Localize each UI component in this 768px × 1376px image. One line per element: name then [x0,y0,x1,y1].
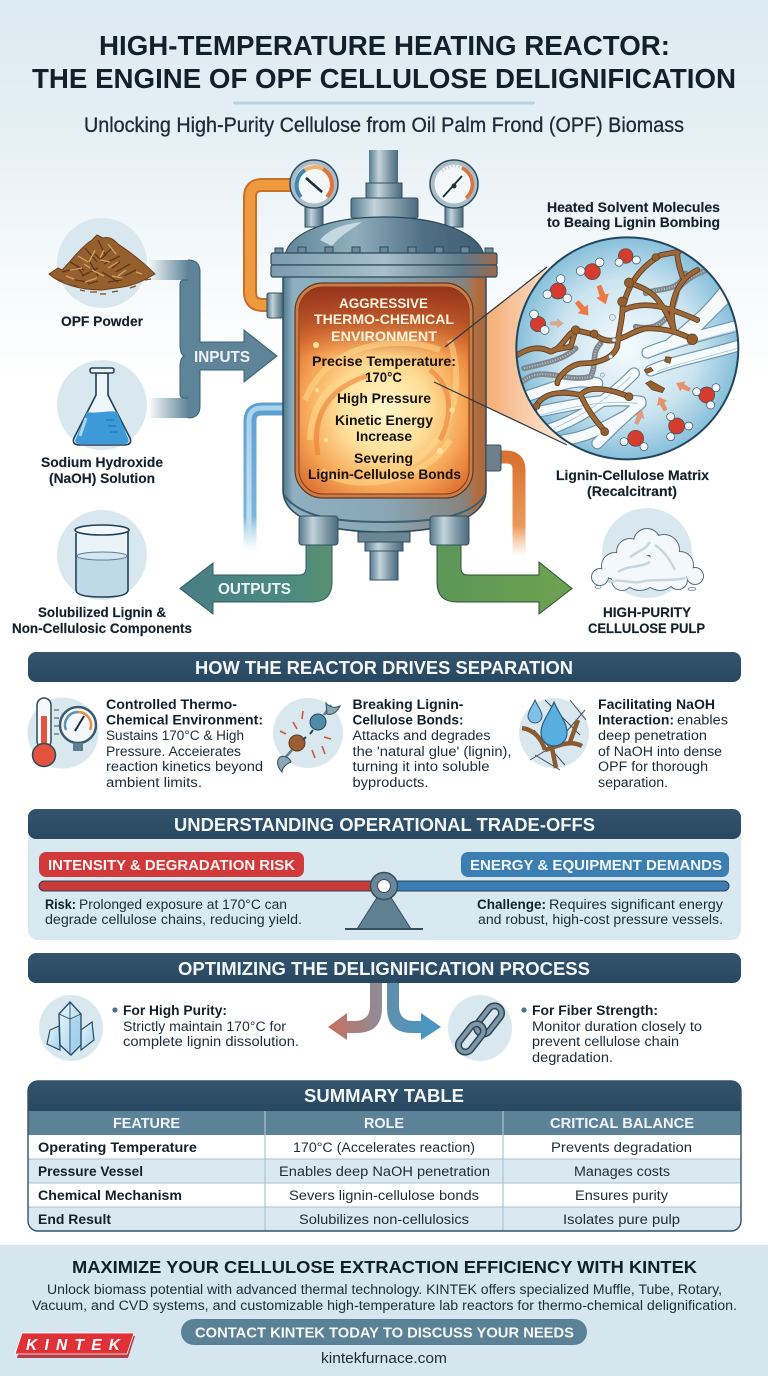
table columns header: FEATURE [113,1115,180,1132]
item: high purity: Strictly maintain 170°C for [123,1019,287,1034]
text: risk [45,897,302,927]
arrow: inputs: INPUTS [194,349,250,366]
item: fiber strength: Monitor duration closely to [532,1019,702,1034]
item: high purity: For High Purity: [123,1003,227,1018]
window text: Severing [354,450,413,466]
pill: intensity and degradation risk: INTENSITY & DEGRADATION RISK [48,857,295,874]
pipe: top left orange [250,185,310,305]
website: kintekfurnace.com [321,1350,447,1367]
footer panel [0,1245,768,1376]
item: controlled environment: Sustains 170°C & High [106,728,244,743]
input item: NaOH flask [57,360,147,450]
item: controlled environment [28,697,263,790]
item: facilitating NaOH interaction: separation. [598,775,668,790]
title: HIGH-TEMPERATURE HEATING REACTOR: [99,30,670,61]
table rows [38,1140,692,1227]
contact button: CONTACT KINTEK TODAY TO DISCUSS YOUR NEEDS [195,1324,574,1342]
table rows: Isolates pure pulp [563,1212,680,1227]
window text: Precise Temperature: [312,353,456,369]
footer heading: MAXIMIZE YOUR CELLULOSE EXTRACTION EFFICIENCY WITH KINTEK [72,1257,697,1277]
summary table [28,1081,741,1231]
side couplings [267,293,283,318]
label: high-purity cellulose pulp: CELLULOSE PULP [588,621,705,636]
gauge: left [290,160,338,208]
table rows: Severs lignin-cellulose bonds [289,1188,479,1203]
icon: chain link [448,995,512,1061]
bottom feet [299,516,338,545]
arrow: cellulose output [437,545,572,614]
label: sodium hydroxide: Sodium Hydroxide [41,455,164,470]
window text: High Pressure [337,390,431,406]
output item: beaker [57,510,147,600]
label: solubilized lignin: Solubilized Lignin & [38,605,166,620]
label: heated solvent molecules: to Beaing Lignin Bombing [547,215,720,230]
fragment sparkles [600,314,616,377]
icon: crystal [39,995,103,1061]
text: risk: degrade cellulose chains, reducing yield. [45,912,302,927]
table rows: End Result [38,1212,112,1227]
table rows: Ensures purity [575,1188,668,1203]
pill: energy and equipment demands [461,852,729,877]
item: breaking bonds: byproducts. [352,775,428,790]
KINTEK logo [15,1333,135,1358]
item: controlled environment: Pressure. Acceierates [106,744,241,759]
pipe: right orange [496,457,519,556]
zoom cone [434,267,567,445]
table rows: 170°C (Accelerates reaction) [293,1140,475,1155]
vessel flange [271,253,497,265]
label: heated solvent molecules [547,200,720,230]
table rows: Solubilizes non-cellulosics [299,1212,469,1227]
label: solubilized lignin [12,605,192,636]
section header: optimizing: OPTIMIZING THE DELIGNIFICATION PROCESS [178,959,590,979]
pipe: left blue [249,408,285,552]
section header: optimizing [28,953,741,983]
section header: trade-offs [28,809,741,839]
item: breaking bonds: Cellulose Bonds: [352,712,464,728]
table rows: Prevents degradation [551,1140,692,1155]
balance scale [39,872,729,930]
item: fiber strength: prevent cellulose chain [532,1034,679,1049]
label: lignin-cellulose matrix: (Recalcitrant) [587,484,677,499]
text: risk: Prolonged exposure at 170°C can [79,897,287,912]
footer text: Unlock biomass potential with advanced thermal technology. KINTEK offers specialized Muffle, Tube, Rotary, [47,1282,722,1297]
item: facilitating NaOH interaction [519,697,728,790]
vessel top pipe [369,150,398,185]
reactor vessel [267,150,501,580]
item: controlled environment: Controlled Thermo- [106,697,237,712]
footer text: Vacuum, and CVD systems, and customizable high-temperature lab reactors for thermo-chemical delignification. [32,1298,737,1313]
section header: trade-offs: UNDERSTANDING OPERATIONAL TRADE-OFFS [174,815,595,835]
table columns header [113,1115,694,1132]
label: OPF powder: OPF Powder [61,314,144,329]
item: facilitating NaOH interaction: deep penetration [598,728,707,743]
window text: AGGRESSIVE [339,295,428,311]
item: facilitating NaOH interaction: Interaction: [598,712,674,728]
table rows: Enables deep NaOH penetration [279,1164,490,1179]
grey lignin strands [521,270,707,383]
window text: Lignin-Cellulose Bonds [308,466,461,482]
window text: 170°C [365,369,402,385]
panel: operational trade-offs [28,809,741,940]
item: high purity: complete lignin dissolution. [123,1034,299,1049]
table rows: Pressure Vessel [38,1164,143,1179]
item: facilitating NaOH interaction: enables [677,712,728,728]
heating window [295,283,473,498]
cellulose fibers [524,287,741,443]
footer text [32,1282,737,1313]
subtitle: Unlocking High-Purity Cellulose from Oil Palm Frond (OPF) Biomass [84,114,684,137]
table rows: Operating Temperature [38,1140,198,1155]
label: heated solvent molecules: Heated Solvent Molecules [547,200,720,215]
item: controlled environment: Chemical Environment: [106,712,263,728]
input item: OPF powder [49,218,155,308]
item: facilitating NaOH interaction: OPF for thorough [598,759,708,774]
label: solubilized lignin: Non-Cellulosic Components [12,621,192,636]
heat arrows [550,283,692,426]
window text: ENVIRONMENT [331,328,437,344]
pill: intensity and degradation risk [39,852,304,877]
item: breaking bonds: Breaking Lignin- [352,697,464,712]
item: controlled environment: ambient limits. [106,775,202,790]
item: high purity [39,995,299,1061]
solvent molecules [530,249,720,451]
KINTEK logo: KINTEK [26,1337,122,1354]
label: high-purity cellulose pulp [588,605,705,636]
item: breaking bonds: the 'natural glue' (lignin), [352,744,512,759]
item: breaking bonds: Attacks and degrades [352,728,491,743]
icon: thermometer and gauge [28,698,98,768]
output item: cellulose pulp [592,508,703,598]
pill: energy and equipment demands: ENERGY & EQUIPMENT DEMANDS [470,857,722,874]
zoom cone edge lines [434,267,567,445]
title [32,30,736,94]
vessel body [283,275,486,532]
window text [308,295,461,482]
text: risk: Risk: [45,897,76,912]
pressure gauge stems [305,205,323,227]
arrow: inputs [148,260,277,418]
label: lignin-cellulose matrix [556,468,710,499]
summary table: SUMMARY TABLE [304,1086,464,1106]
item: fiber strength: degradation. [532,1050,613,1065]
table columns header: CRITICAL BALANCE [550,1115,694,1132]
window text: Kinetic Energy [335,412,433,428]
label: sodium hydroxide [41,455,164,486]
item: fiber strength: For Fiber Strength: [532,1003,658,1018]
text: challenge: Challenge: [477,897,546,912]
text: challenge [477,897,723,927]
section header: how the reactor drives separation: HOW THE REACTOR DRIVES SEPARATION [195,658,573,678]
table columns header: ROLE [364,1115,404,1132]
arrows: optimization split [328,983,441,1040]
arrow: outputs [180,545,332,614]
item: breaking bonds: turning it into soluble [352,759,490,774]
window text: THERMO-CHEMICAL [314,311,454,327]
item: controlled environment: reaction kinetics beyond [106,759,263,774]
magnified lignin-cellulose circle [516,237,741,459]
item: fiber strength [448,995,702,1065]
label: high-purity cellulose pulp: HIGH-PURITY [603,605,691,620]
icon: broken bond [273,698,343,772]
label: lignin-cellulose matrix: Lignin-Cellulose Matrix [556,468,710,483]
window text: Increase [356,428,412,444]
item: breaking bonds [273,697,512,790]
contact button [181,1319,587,1345]
table rows: Manages costs [574,1164,670,1179]
lignin network [517,252,697,432]
section header: how the reactor drives separation [28,652,741,682]
label: sodium hydroxide: (NaOH) Solution [49,471,155,486]
table rows: Chemical Mechanism [38,1188,182,1203]
vessel dome [285,217,484,255]
item: facilitating NaOH interaction: of NaOH into dense [598,744,722,759]
gauge: right [430,160,478,208]
arrow: outputs: OUTPUTS [218,581,291,598]
text: challenge: and robust, high-cost pressure vessels. [478,912,723,927]
item: facilitating NaOH interaction: Facilitating NaOH [598,697,715,712]
text: challenge: Requires significant energy [549,897,723,912]
icon: droplets and fibers [519,698,589,770]
title: THE ENGINE OF OPF CELLULOSE DELIGNIFICATION [32,63,736,94]
